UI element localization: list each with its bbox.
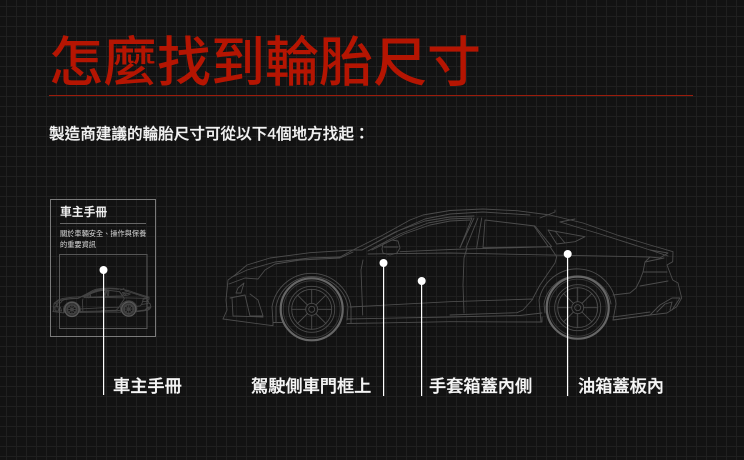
pointer: driver door frame <box>380 259 388 396</box>
label: owner manual: 車主手冊 <box>113 376 182 396</box>
manual description: 關於車輛安全、操作與保養 <box>60 229 146 238</box>
manual description: 的重要資訊 <box>60 240 96 249</box>
icon: small car <box>53 288 151 316</box>
manual description <box>60 229 146 249</box>
pointer: owner manual <box>100 266 108 395</box>
pointer: glove box lid <box>418 277 426 396</box>
pointer: fuel door <box>564 250 572 396</box>
title: 怎麼找到輪胎尺寸 <box>49 33 481 93</box>
illustration: car blueprint <box>223 209 682 340</box>
label: glove box lid: 手套箱蓋內側 <box>429 376 532 396</box>
manual heading: 車主手冊 <box>60 205 107 219</box>
subtitle: 製造商建議的輪胎尺寸可從以下4個地方找起： <box>49 126 370 143</box>
label: driver door frame: 駕駛側車門框上 <box>251 376 371 396</box>
panel: owner manual <box>50 200 156 336</box>
title underline <box>49 94 693 96</box>
label: fuel door: 油箱蓋板內 <box>578 376 664 396</box>
